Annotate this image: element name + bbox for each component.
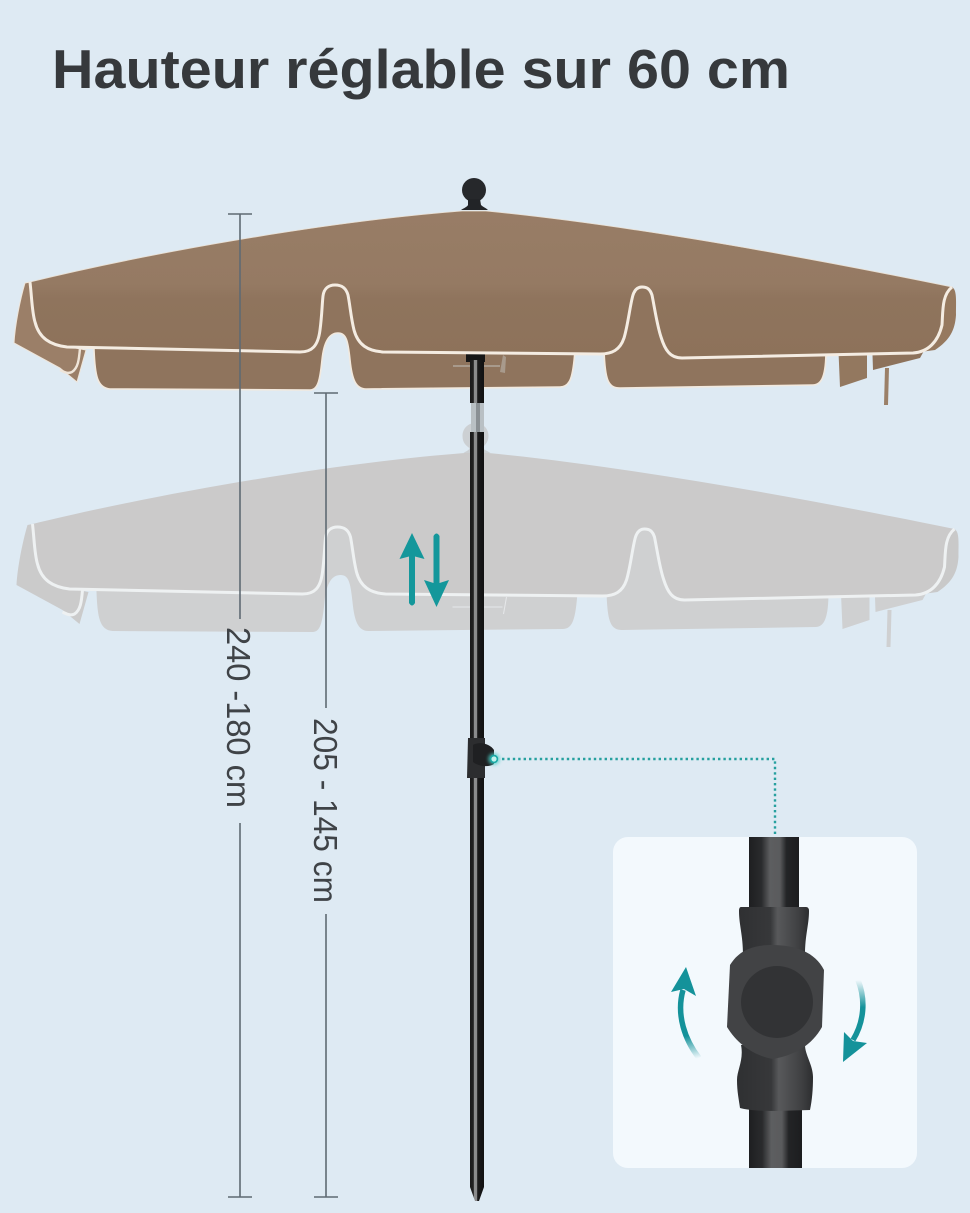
dotted leader (502, 759, 775, 838)
spring shadow (476, 403, 480, 432)
dimension: total height (220, 214, 257, 1197)
ghost rear valance (96, 522, 932, 647)
inner flap piping (60, 348, 80, 373)
spring body (471, 403, 484, 432)
canopy piping (30, 282, 952, 358)
lower tube (749, 1108, 802, 1168)
lower collar (737, 1045, 813, 1111)
ghost side flap right (916, 529, 959, 595)
up arrow (400, 533, 424, 606)
rotation arrow right (843, 980, 867, 1062)
right arc (853, 980, 863, 1040)
callout connector (488, 753, 775, 838)
raised parasol finial (461, 178, 488, 210)
ghost side flap left (16, 524, 88, 624)
left arc (681, 990, 699, 1058)
hub (727, 945, 824, 1059)
panel background (613, 837, 917, 1168)
ghost rib bracket (452, 597, 506, 614)
rear valance panel one (94, 280, 575, 390)
ghost canopy top (32, 453, 954, 600)
main pole (453, 354, 506, 1201)
joint collar (467, 738, 485, 778)
tilt spring (471, 403, 484, 432)
lowered parasol canopy (ghost) (16, 423, 959, 647)
upper collar (739, 907, 809, 955)
raised parasol rear valance (14, 280, 930, 405)
dimension line lower (314, 393, 338, 1197)
raised parasol canopy top (30, 211, 952, 358)
lower pole section (470, 432, 484, 1201)
right side flap (913, 287, 956, 353)
hanging strap (884, 368, 889, 405)
height joint (467, 738, 494, 778)
upper pole top cap (466, 354, 485, 362)
knob (741, 966, 813, 1038)
label 240-180 cm: 240 -180 cm (220, 627, 257, 808)
dimension line upper (228, 214, 252, 1197)
right arrow head (843, 1032, 867, 1062)
dimension: pole height (307, 393, 344, 1197)
label 205-145 cm: 205 - 145 cm (307, 718, 344, 903)
rotation arrow left (671, 967, 699, 1058)
side flap left (14, 282, 86, 382)
upper pole section (470, 360, 484, 403)
panel: crank detail (613, 837, 917, 1168)
down arrow (424, 534, 449, 607)
dot (491, 756, 497, 762)
finial neck (461, 199, 488, 210)
corner flap (872, 340, 930, 370)
title: Hauteur réglable sur 60 cm (52, 38, 790, 100)
up and down arrows (400, 533, 449, 607)
finial ball (462, 178, 486, 202)
rib bracket (453, 355, 506, 373)
upper tube (749, 837, 799, 909)
small flap (838, 340, 867, 387)
left arrow head (671, 967, 696, 996)
rear valance panel two (604, 280, 826, 388)
ghost finial (462, 423, 490, 453)
joint knob (473, 743, 494, 766)
ghost piping (32, 524, 954, 615)
glow (488, 753, 500, 765)
